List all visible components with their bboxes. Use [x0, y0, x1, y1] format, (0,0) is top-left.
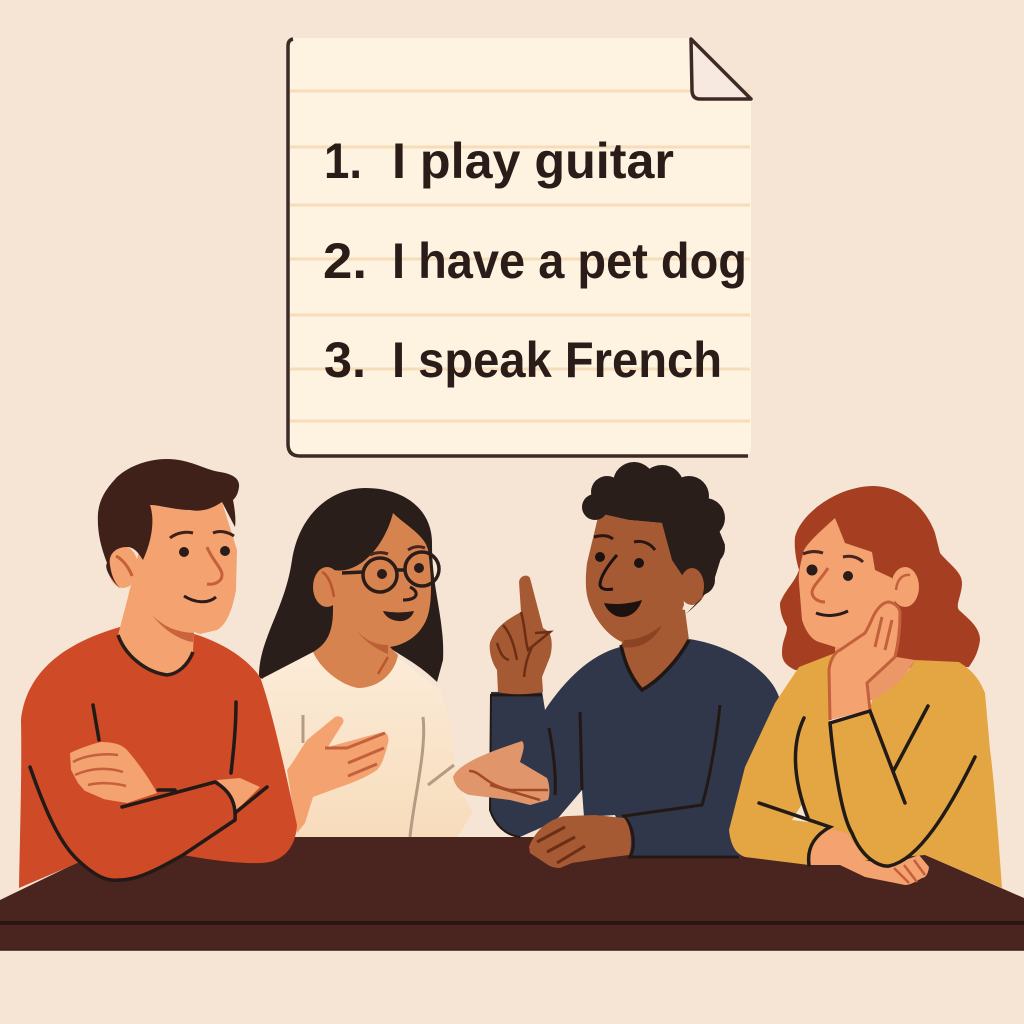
sleeve gap	[792, 804, 808, 822]
list item 1: I play guitar	[392, 133, 674, 189]
hand: resting on table	[809, 828, 929, 885]
hand: palm of woman in white	[453, 741, 549, 805]
list item 3: 3.	[324, 332, 366, 388]
person: woman in yellow sweater	[729, 486, 1002, 888]
hand: pointing finger	[490, 576, 552, 694]
list item 2: I have a pet dog	[392, 233, 747, 289]
list item 1: 1.	[324, 133, 362, 189]
table	[0, 837, 1024, 950]
hand: resting on table	[529, 815, 631, 868]
hair	[98, 459, 239, 597]
list item 3: I speak French	[392, 332, 722, 388]
person: man in red sweater	[19, 459, 297, 888]
hand: tucked under arm	[70, 742, 157, 803]
icon: folded corner	[691, 39, 751, 99]
hair: curls	[582, 462, 725, 615]
list item 2: 2.	[323, 233, 367, 289]
arm: folded sleeve	[830, 706, 975, 866]
hand: open palm	[287, 716, 388, 833]
hand: under sleeve	[217, 778, 260, 812]
panel: note with list	[288, 38, 751, 456]
person: woman in white with glasses	[259, 488, 473, 837]
person: man in navy sweater	[490, 462, 779, 868]
arm: crossed sleeve	[30, 767, 235, 880]
hand: on cheek	[829, 602, 900, 720]
